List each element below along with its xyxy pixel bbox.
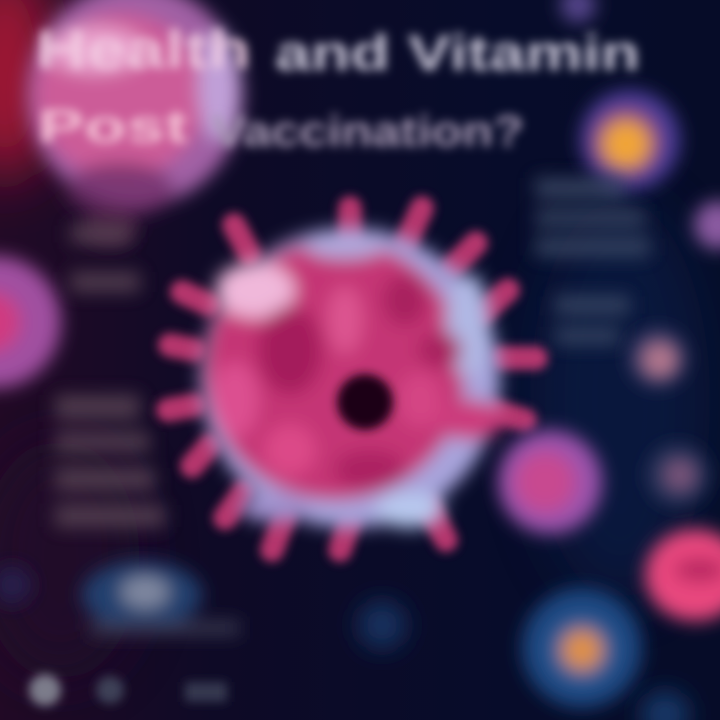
title: Vaccination? bbox=[212, 107, 524, 156]
virus spikes bbox=[168, 208, 536, 550]
top left cell behind the title bbox=[27, 0, 243, 246]
central virus bbox=[168, 208, 536, 550]
pink cell lower right of virus bbox=[498, 430, 602, 534]
bottom faint cell bbox=[358, 601, 406, 649]
title: and Vitamin bbox=[275, 25, 640, 81]
title: Health bbox=[36, 20, 251, 80]
title bbox=[36, 20, 640, 156]
title: Post bbox=[38, 100, 188, 152]
virus core bbox=[337, 374, 393, 430]
bottom left small icons bbox=[29, 674, 227, 706]
right orange cell bbox=[580, 90, 680, 190]
bottom left cell bbox=[0, 561, 240, 634]
small right cells bbox=[630, 201, 720, 505]
top small cell bbox=[560, 0, 596, 23]
right text lines bbox=[535, 178, 650, 344]
virus body bbox=[200, 228, 504, 528]
bottom right faint cell bbox=[641, 691, 689, 720]
bottom blue cell bbox=[522, 588, 642, 708]
left edge cell bbox=[0, 256, 61, 388]
left text lines bbox=[55, 225, 165, 527]
right edge pink cell bbox=[645, 529, 720, 621]
